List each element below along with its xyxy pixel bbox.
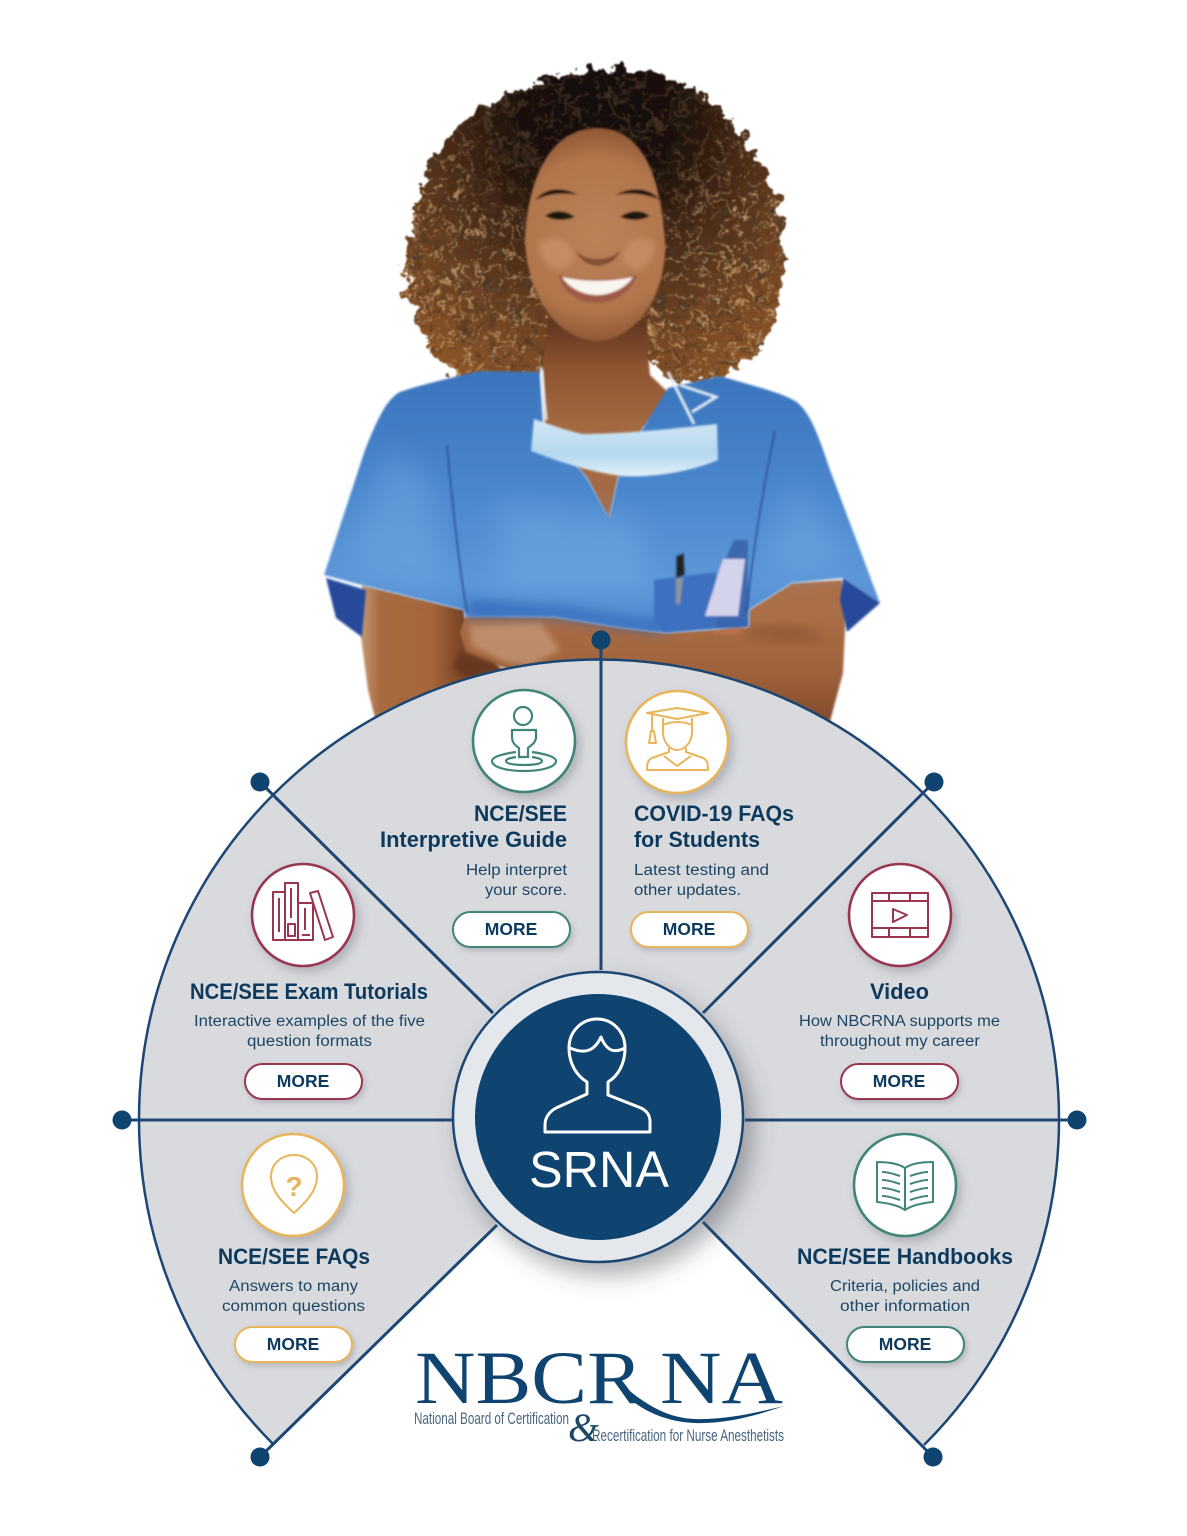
nurse arms bbox=[361, 580, 846, 745]
segment: Video bbox=[799, 864, 1000, 1099]
description: Answers to many bbox=[229, 1278, 358, 1295]
heading: Video bbox=[870, 979, 929, 1004]
button: more bbox=[841, 1064, 958, 1099]
button: more bbox=[847, 1327, 964, 1362]
button: more bbox=[631, 912, 748, 947]
heading: NCE/SEE Handbooks bbox=[797, 1244, 1013, 1269]
label: SRNA: SRNA bbox=[529, 1141, 669, 1198]
description bbox=[194, 1013, 425, 1050]
segment: NCE/SEE Interpretive Guide bbox=[380, 690, 575, 947]
nurse neck bbox=[543, 320, 672, 520]
heading: Interpretive Guide bbox=[380, 827, 567, 852]
logo: NBCRNA: Recertification for Nurse Anesthetists bbox=[592, 1427, 784, 1445]
description: Criteria, policies and bbox=[830, 1278, 980, 1295]
panel: radial wheel background bbox=[139, 659, 1059, 1445]
icon: film strip bbox=[849, 864, 951, 966]
center hub: SRNA bbox=[453, 972, 743, 1262]
button: more: MORE bbox=[879, 1334, 931, 1354]
logo: NBCRNA: National Board of Certification bbox=[414, 1410, 569, 1428]
heading bbox=[380, 801, 567, 852]
description: your score. bbox=[485, 882, 567, 899]
button: more: MORE bbox=[277, 1071, 329, 1091]
icon: graduate bbox=[626, 691, 728, 793]
description: Help interpret bbox=[466, 862, 568, 879]
logo: NBCRNA: NA bbox=[660, 1337, 783, 1420]
description bbox=[799, 1013, 1000, 1050]
heading: for Students bbox=[634, 827, 760, 852]
nurse scrubs top bbox=[324, 371, 880, 637]
heading bbox=[634, 801, 794, 852]
heading: NCE/SEE bbox=[474, 801, 567, 826]
description: How NBCRNA supports me bbox=[799, 1013, 1000, 1030]
segment: COVID-19 FAQs for Students bbox=[626, 691, 794, 947]
nurse face bbox=[525, 128, 665, 341]
description: common questions bbox=[222, 1298, 365, 1315]
description bbox=[222, 1278, 365, 1315]
logo: NBCRNA: NBCR bbox=[415, 1337, 643, 1420]
button: more: MORE bbox=[873, 1071, 925, 1091]
description bbox=[634, 862, 769, 899]
nurse face mask bbox=[531, 367, 718, 476]
icon: question pin: ? bbox=[285, 1171, 303, 1202]
description: other information bbox=[840, 1298, 970, 1315]
description bbox=[466, 862, 568, 899]
segment: NCE/SEE Exam Tutorials bbox=[190, 864, 428, 1099]
heading: NCE/SEE Exam Tutorials bbox=[190, 979, 428, 1004]
icon: target figure bbox=[473, 690, 575, 792]
segment: NCE/SEE Handbooks bbox=[797, 1134, 1013, 1362]
spokes and end dots bbox=[112, 630, 1086, 1466]
description: throughout my career bbox=[820, 1033, 980, 1050]
icon: question pin bbox=[242, 1134, 344, 1236]
button: more bbox=[453, 912, 570, 947]
icon: books bbox=[252, 864, 354, 966]
description bbox=[830, 1278, 980, 1315]
nurse hair bbox=[397, 62, 793, 400]
button: more bbox=[235, 1327, 352, 1362]
logo: NBCRNA bbox=[414, 1337, 784, 1450]
button: more: MORE bbox=[267, 1334, 319, 1354]
button: more: MORE bbox=[663, 919, 715, 939]
segment: NCE/SEE FAQs bbox=[218, 1134, 370, 1362]
icon: person bbox=[545, 1019, 650, 1132]
heading: COVID-19 FAQs bbox=[634, 801, 794, 826]
description: question formats bbox=[247, 1033, 372, 1050]
description: Interactive examples of the five bbox=[194, 1013, 425, 1030]
heading: NCE/SEE FAQs bbox=[218, 1244, 370, 1269]
button: more: MORE bbox=[485, 919, 537, 939]
icon: open book bbox=[854, 1134, 956, 1236]
description: Latest testing and bbox=[634, 862, 769, 879]
logo: NBCRNA: & bbox=[568, 1405, 599, 1450]
photo: smiling nurse in blue scrubs bbox=[324, 62, 880, 745]
description: other updates. bbox=[634, 882, 741, 899]
button: more bbox=[245, 1064, 362, 1099]
